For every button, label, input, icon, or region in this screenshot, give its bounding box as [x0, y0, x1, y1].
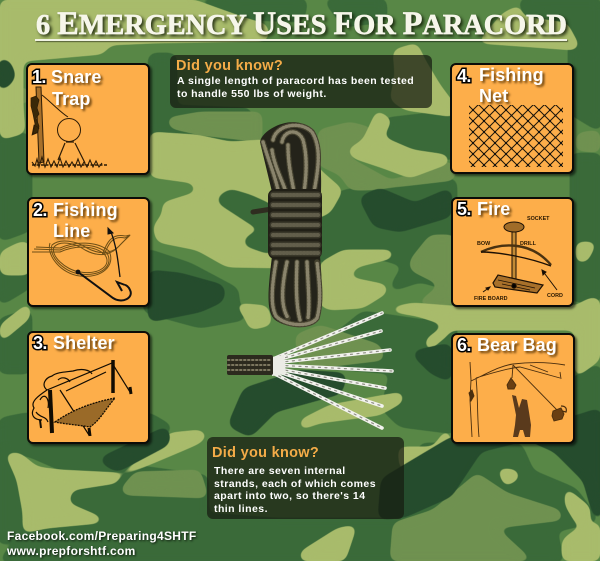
- panel: 5 fire: 5.: [457, 199, 471, 219]
- panel: 1 snare trap: 1.: [32, 67, 46, 87]
- panel: did you know, inner strands: [207, 437, 404, 519]
- panel: 6 bear bag: Bear Bag: [477, 335, 557, 355]
- panel: 4 fishing net: Fishing: [479, 65, 544, 85]
- icon: bow drill: SOCKET: [527, 216, 550, 222]
- panel: 4 fishing net: 4.: [457, 66, 471, 86]
- footer links: www.prepforshtf.com: [7, 544, 136, 558]
- panel: 2 fishing line: Line: [53, 221, 90, 241]
- panel: 3 shelter: [27, 331, 150, 444]
- panel: did you know, inner strands: strands, each of which comes: [214, 478, 376, 490]
- panel: 4 fishing net: [450, 63, 574, 174]
- panel: 1 snare trap: [26, 63, 150, 175]
- footer links: Facebook.com/Preparing4SHTF: [7, 529, 196, 543]
- inner strands: [273, 313, 392, 428]
- paracord coil: [250, 122, 322, 328]
- opened paracord with inner strands: [227, 311, 394, 430]
- panel: did you know, breaking strength: Did you know?: [176, 58, 283, 74]
- icon: bow drill: CORD: [547, 293, 563, 299]
- panel: 1 snare trap: Snare: [51, 67, 102, 87]
- icon: bow drill: [474, 216, 563, 302]
- icon: bow drill: BOW: [477, 241, 491, 247]
- icon: bear and hanging bag: [468, 362, 567, 437]
- panel: 2 fishing line: [27, 197, 150, 307]
- icon: lean-to shelter: [32, 360, 132, 436]
- panel: did you know, inner strands: apart into two, so there's 14: [214, 490, 366, 502]
- panel: did you know, inner strands: thin lines.: [214, 502, 268, 514]
- icon: bow drill: DRILL: [520, 241, 537, 247]
- panel: 2 fishing line: 2.: [33, 200, 47, 220]
- panel: 1 snare trap: Trap: [52, 89, 90, 109]
- icon: snare trap: [30, 86, 107, 169]
- panel: did you know, inner strands: There are seven internal: [214, 465, 346, 477]
- title: 6 EMERGENCY USES FOR PARACORD: [36, 6, 567, 42]
- panel: 3 shelter: 3.: [33, 333, 47, 353]
- panel: 2 fishing line: Fishing: [53, 200, 118, 220]
- icon: fishing knot and hook: [32, 226, 132, 302]
- panel: 6 bear bag: 6.: [457, 335, 471, 355]
- icon: net: [469, 105, 563, 167]
- panel: did you know, breaking strength: [170, 55, 432, 108]
- icon: bow drill: FIRE BOARD: [474, 296, 508, 302]
- panel: 5 fire: [451, 197, 574, 307]
- panel: did you know, inner strands: Did you know?: [212, 445, 319, 461]
- panel: 6 bear bag: [451, 333, 575, 444]
- loops top and bottom: [263, 125, 320, 325]
- panel: 5 fire: Fire: [477, 199, 510, 219]
- panel: 4 fishing net: Net: [479, 86, 508, 106]
- panel: did you know, breaking strength: A single length of paracord has been tested: [177, 75, 414, 87]
- panel: did you know, breaking strength: to handle 550 lbs of weight.: [177, 88, 327, 100]
- panel: 3 shelter: Shelter: [53, 333, 115, 353]
- braided sheath: [227, 355, 273, 375]
- rope wraps: [268, 189, 322, 259]
- coil silhouette: [260, 122, 322, 326]
- footer links: [7, 529, 198, 560]
